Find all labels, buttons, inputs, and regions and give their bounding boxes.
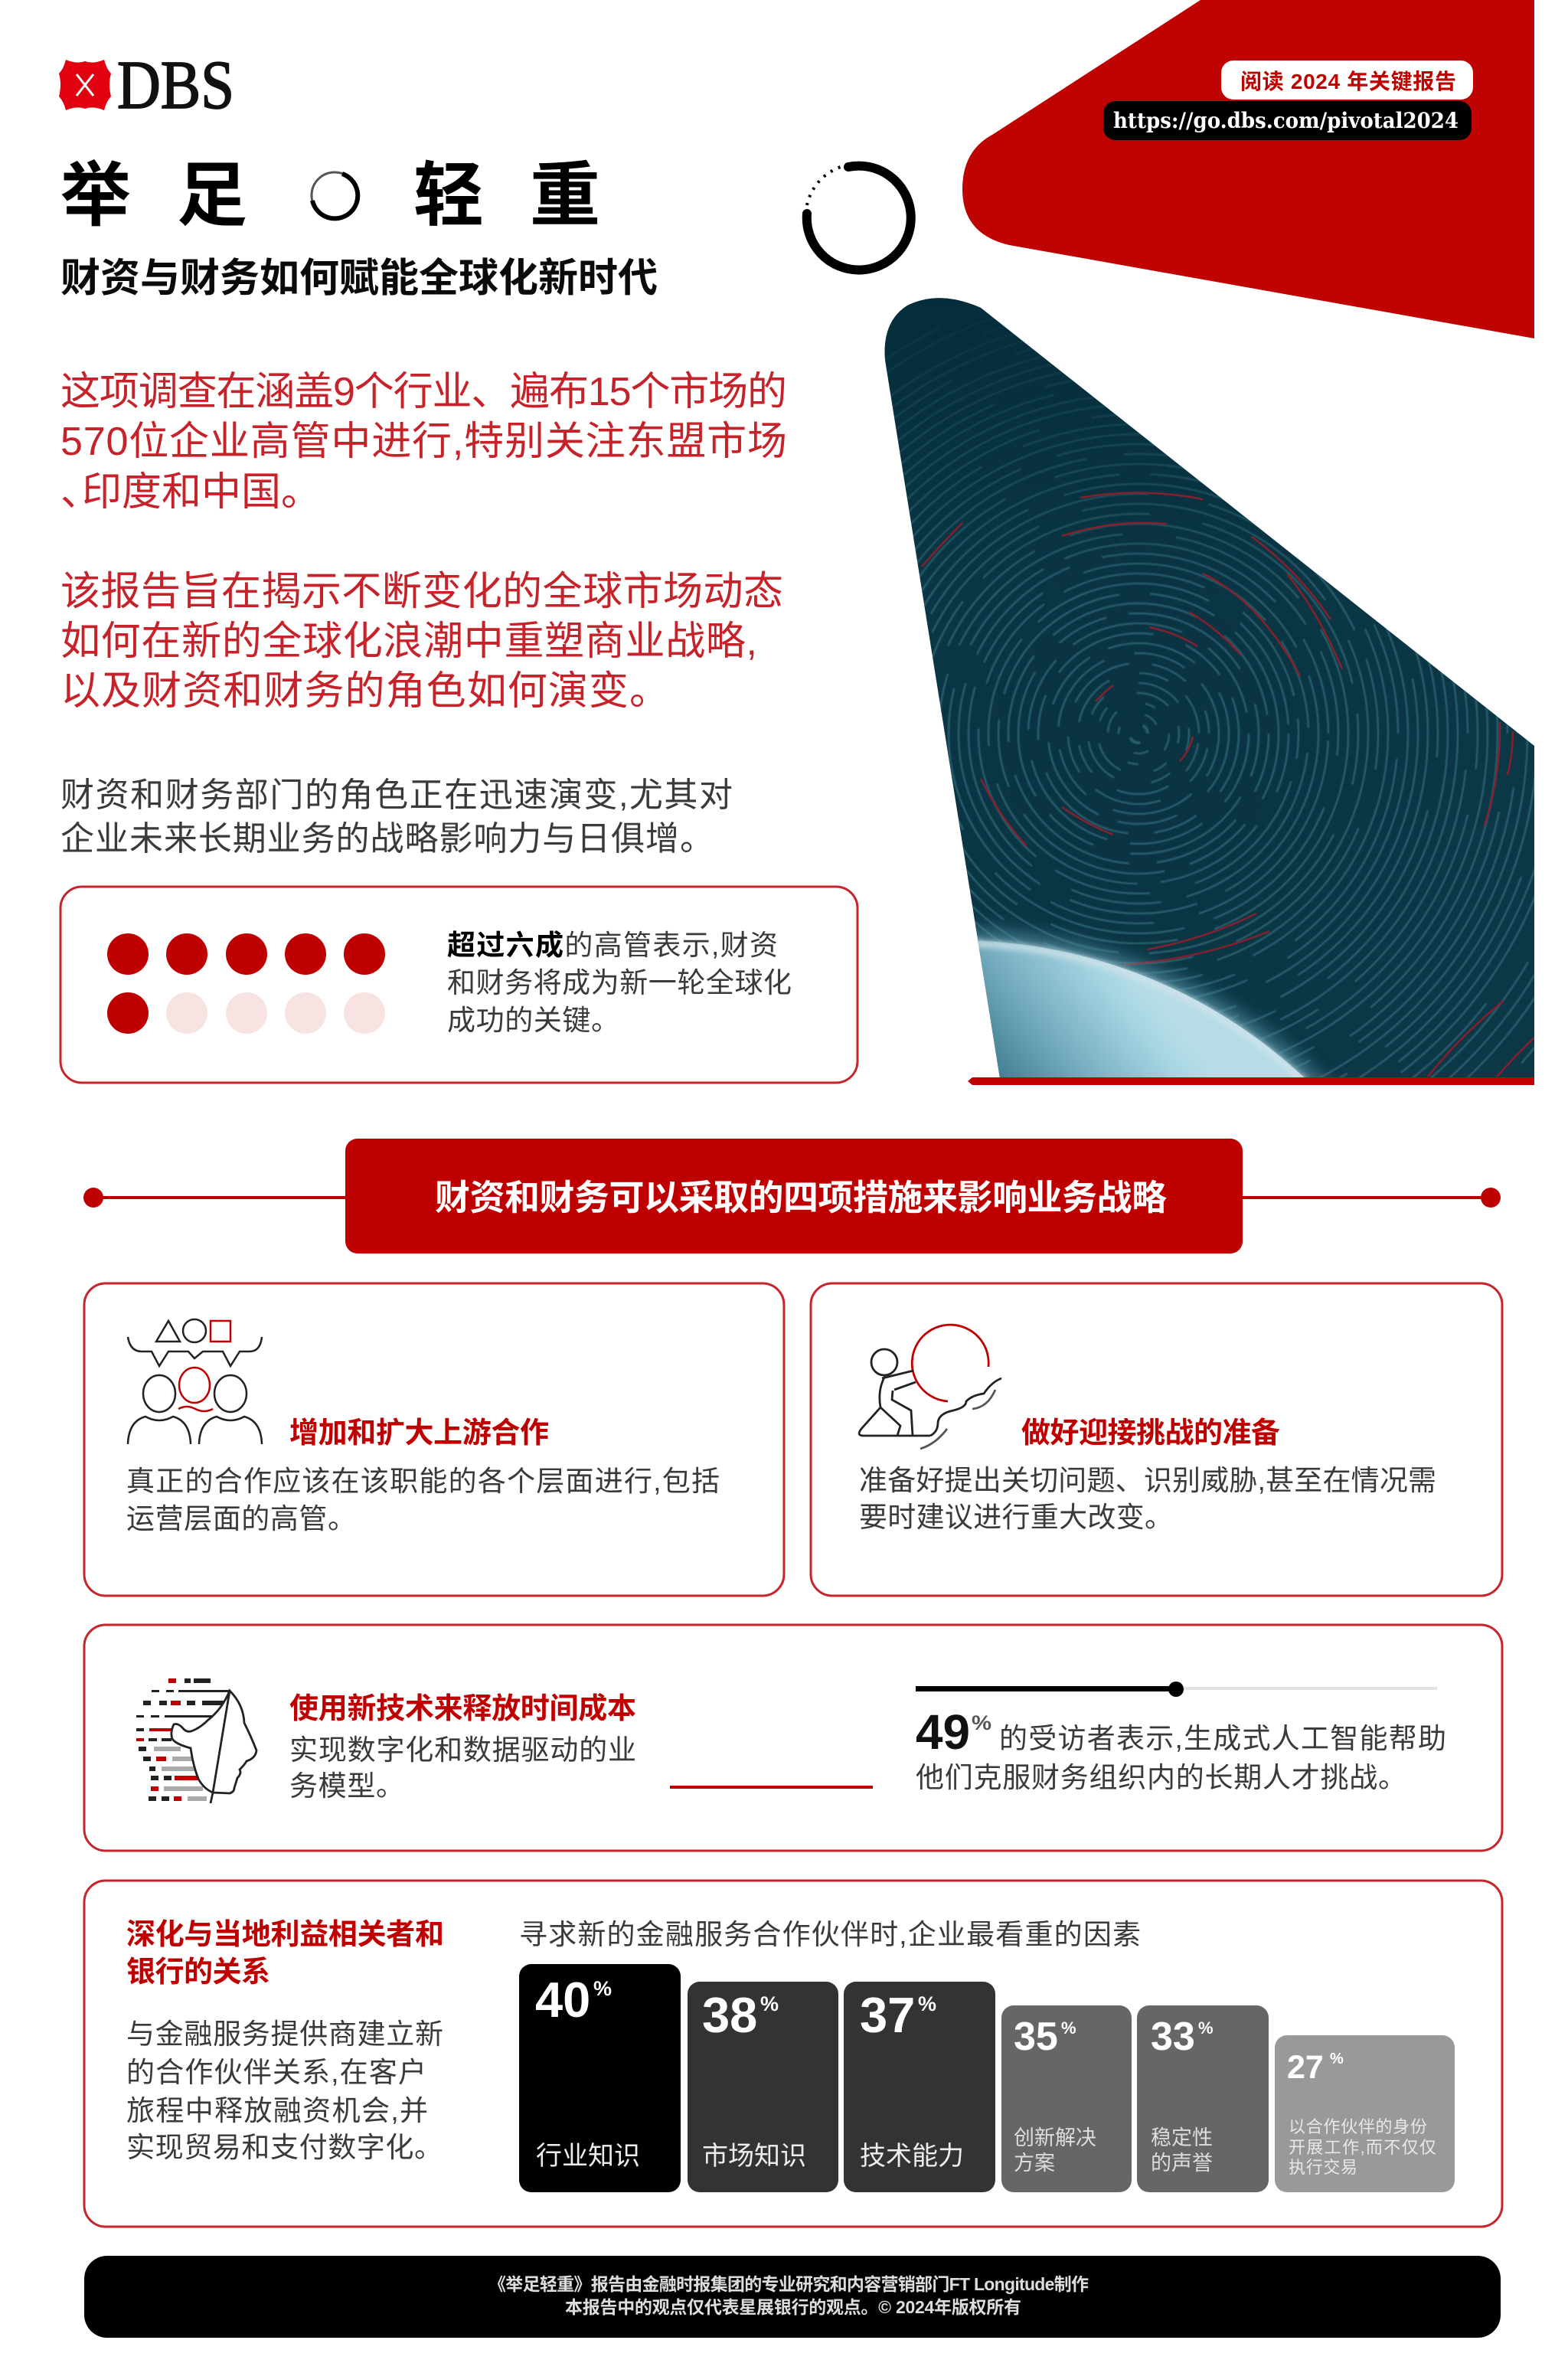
body text — [126, 1466, 720, 1534]
bar: 33 percent: 33 — [1151, 2015, 1195, 2059]
text block: intro paragraph 3: 财资和财务部门的角色正在迅速演变,尤其对 — [60, 776, 733, 814]
bar: 27 percent: 27 — [1287, 2049, 1324, 2086]
bar: 37 percent: 37 — [860, 1987, 915, 2043]
icon: small title ring — [312, 172, 358, 218]
bar: 37 percent: % — [918, 1992, 936, 2015]
divider connector — [670, 1786, 873, 1789]
bar chart: partner factors — [519, 1964, 1455, 2192]
text block: intro paragraph 2: 如何在新的全球化浪潮中重塑商业战略, — [60, 619, 757, 664]
panel: six in ten callout — [60, 887, 858, 1083]
bar: 35 percent: 创新解决 — [1014, 2126, 1096, 2149]
title: 举 — [60, 157, 131, 235]
footer bar — [84, 2256, 1501, 2338]
button: report link: https://go.dbs.com/pivotal2024 — [1113, 108, 1459, 133]
heading: 银行的关系 — [126, 1956, 270, 1989]
bar: 33 percent — [1137, 2005, 1269, 2192]
text block: intro paragraph 3: 企业未来长期业务的战略影响力与日俱增。 — [60, 820, 714, 858]
body text: 要时建议进行重大改变。 — [859, 1502, 1173, 1533]
heading: 增加和扩大上游合作 — [289, 1417, 549, 1450]
text block: intro paragraph 2: 该报告旨在揭示不断变化的全球市场动态 — [60, 570, 783, 614]
bar: 37 percent — [844, 1982, 995, 2192]
subtitle: 财资与财务如何赋能全球化新时代 — [60, 257, 658, 301]
body text: 旅程中释放融资机会,并 — [126, 2095, 428, 2126]
section header banner — [83, 1139, 1501, 1253]
bar: 33 percent: 稳定性 — [1151, 2126, 1213, 2149]
bar: 35 percent: % — [1061, 2018, 1076, 2038]
footer bar: 《举足轻重》报告由金融时报集团的专业研究和内容营销部门FT Longitude制作 — [488, 2274, 1089, 2294]
body text — [126, 2018, 443, 2163]
logo: DBS — [59, 47, 234, 123]
panel: prepare for challenges — [811, 1283, 1502, 1596]
bar: 40 percent: % — [593, 1977, 612, 2000]
heading: 深化与当地利益相关者和 — [126, 1919, 444, 1951]
bar: 35 percent: 35 — [1014, 2015, 1058, 2059]
callout text: 和财务将成为新一轮全球化 — [447, 967, 792, 998]
bar: 37 percent: 技术能力 — [860, 2142, 964, 2171]
bar: 27 percent: 执行交易 — [1289, 2158, 1357, 2177]
stat: 49 percent: % — [972, 1711, 991, 1734]
body text: 真正的合作应该在该职能的各个层面进行,包括 — [126, 1466, 720, 1497]
progress bar: 49 percent — [916, 1682, 1437, 1697]
text block: intro paragraph 3 — [60, 776, 733, 858]
heading: 使用新技术来释放时间成本 — [289, 1693, 636, 1725]
title — [60, 157, 600, 235]
section header banner: 财资和财务可以采取的四项措施来影响业务战略 — [435, 1178, 1167, 1217]
heading: 做好迎接挑战的准备 — [1021, 1417, 1280, 1450]
button: read report — [1221, 60, 1473, 100]
bar: 38 percent: 市场知识 — [702, 2142, 806, 2171]
bar: 35 percent — [1001, 2005, 1132, 2192]
icon: data face profile — [136, 1678, 256, 1803]
text block: intro paragraph 1: 、 — [60, 470, 100, 515]
body text: 实现数字化和数据驱动的业 — [289, 1734, 636, 1766]
bar: 27 percent: 以合作伙伴的身份 — [1289, 2117, 1427, 2136]
stat description — [916, 1723, 1446, 1793]
body text: 与金融服务提供商建立新 — [126, 2018, 443, 2050]
bar: 33 percent: % — [1198, 2018, 1214, 2038]
text block: intro paragraph 1: 印度和中国。 — [82, 470, 321, 515]
callout text: 超过六成的高管表示,财资 — [447, 930, 778, 961]
body text — [859, 1465, 1436, 1533]
dot chart: six of ten — [107, 933, 385, 1034]
text block: intro paragraph 2 — [60, 570, 783, 714]
icon: spinner ring — [807, 166, 911, 270]
footer bar: 本报告中的观点仅代表星展银行的观点。© 2024年版权所有 — [565, 2297, 1021, 2317]
chart title: 寻求新的金融服务合作伙伴时,企业最看重的因素 — [519, 1919, 1141, 1950]
body text: 实现贸易和支付数字化。 — [126, 2132, 443, 2163]
bar: 27 percent: 开展工作,而不仅仅 — [1289, 2138, 1436, 2157]
bar: 40 percent — [519, 1964, 681, 2192]
text block: intro paragraph 1: 570位企业高管中进行,特别关注东盟市场 — [60, 420, 787, 464]
bar: 35 percent: 方案 — [1014, 2152, 1055, 2175]
red baseline bar — [968, 1077, 1534, 1085]
button: read report: 阅读 2024 年关键报告 — [1240, 70, 1456, 93]
bar: 27 percent: % — [1330, 2051, 1344, 2067]
bar: 38 percent: 38 — [702, 1987, 757, 2043]
text block: intro paragraph 1 — [60, 370, 787, 515]
text block: intro paragraph 1: 这项调查在涵盖9个行业、遍布15个市场的 — [60, 370, 787, 414]
stat description: 的受访者表示,生成式人工智能帮助 — [999, 1723, 1446, 1754]
button: report link — [1103, 101, 1472, 140]
title: 轻 — [413, 157, 484, 235]
icon: people sharing ideas — [128, 1319, 262, 1444]
body text: 准备好提出关切问题、识别威胁,甚至在情况需 — [859, 1465, 1436, 1496]
body text — [289, 1734, 636, 1802]
panel: new technology — [84, 1625, 1502, 1851]
bar: 40 percent: 40 — [535, 1972, 590, 2028]
title: 重 — [530, 157, 600, 235]
body text: 务模型。 — [289, 1770, 404, 1802]
panel: local stakeholders — [84, 1881, 1502, 2227]
body text: 运营层面的高管。 — [126, 1503, 356, 1534]
callout text — [447, 930, 792, 1036]
panel: upstream collaboration — [84, 1283, 784, 1596]
logo: DBS: DBS — [117, 47, 234, 123]
body text: 的合作伙伴关系,在客户 — [126, 2057, 426, 2088]
bar: 33 percent: 的声誉 — [1151, 2152, 1213, 2175]
callout text: 成功的关键。 — [447, 1005, 619, 1036]
stat description: 他们克服财务组织内的长期人才挑战。 — [916, 1762, 1406, 1793]
bar: 27 percent — [1275, 2035, 1455, 2192]
text block: intro paragraph 2: 以及财资和财务的角色如何演变。 — [60, 669, 669, 714]
bar: 40 percent: 行业知识 — [536, 2142, 640, 2171]
bar: 38 percent: % — [760, 1992, 779, 2015]
bar: 38 percent — [688, 1982, 838, 2192]
stat: 49 percent: 49 — [916, 1704, 970, 1760]
icon: figure pushing boulder — [859, 1325, 1001, 1449]
panel: red corner shape — [962, 0, 1534, 338]
image: star trails and planet — [885, 298, 1534, 1077]
heading — [126, 1919, 444, 1989]
title: 足 — [177, 157, 247, 235]
